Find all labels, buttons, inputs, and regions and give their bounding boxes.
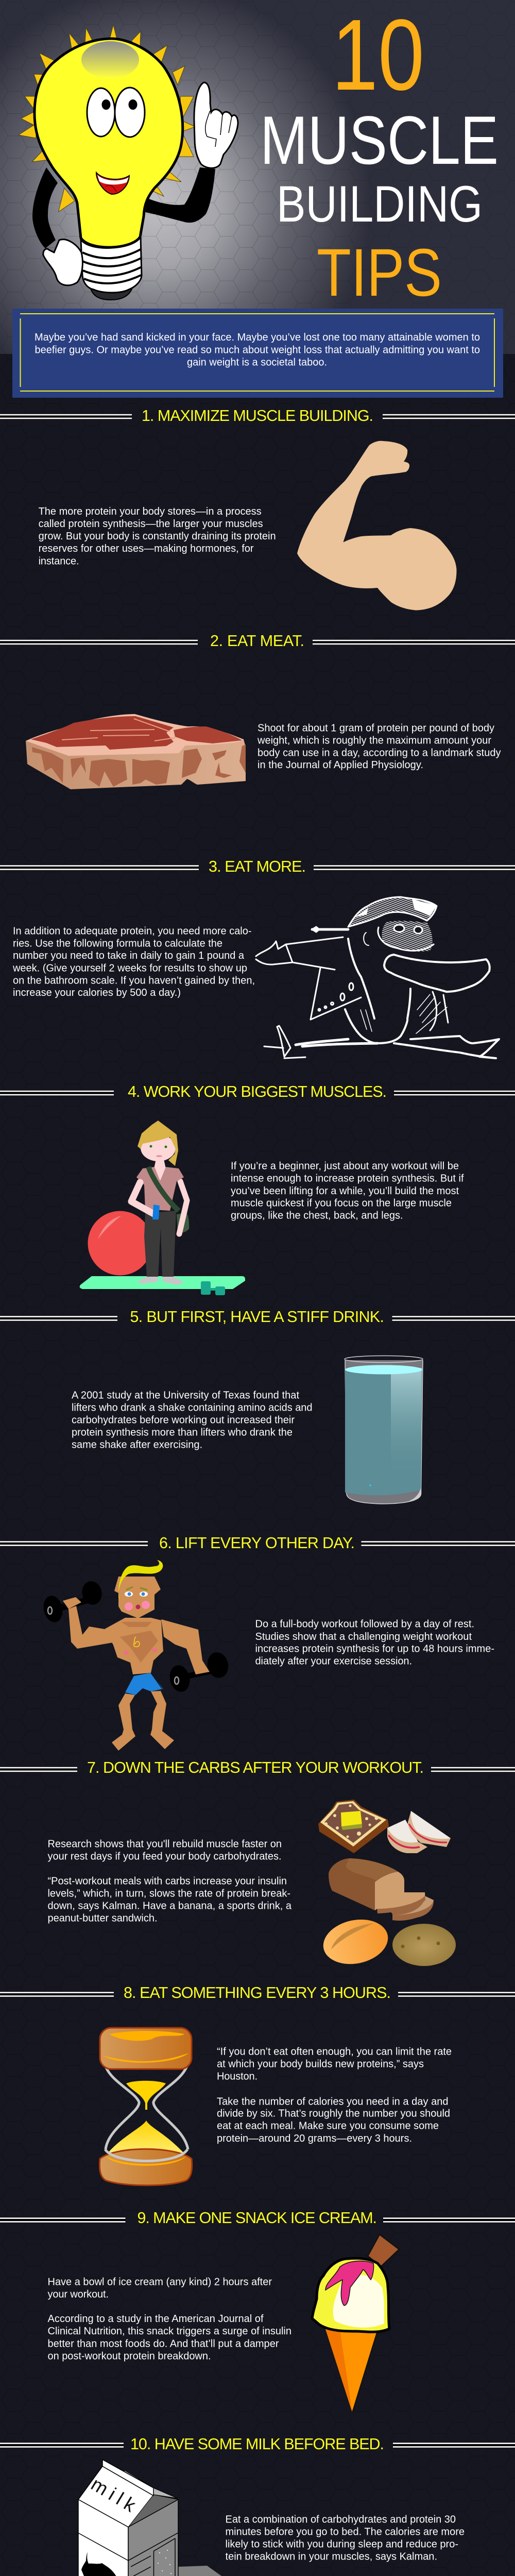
cow silhouette: [80, 2552, 127, 2576]
panel: intro: [12, 309, 503, 398]
text: tip 4: If you’re a beginner, just about any workout will be: [231, 1160, 459, 1172]
intro text: Maybe you’ve had sand kicked in your face. Maybe you’ve lost one too many attainable women to: [35, 332, 480, 343]
panel: tip 4: [0, 1083, 515, 1295]
scoop: [312, 2258, 389, 2332]
panel: tip 9: [0, 2209, 515, 2413]
carton roof: [78, 2466, 153, 2527]
hair: [138, 1121, 178, 1166]
text: tip 9: better than most foods do. And that’ll put a damper: [47, 2338, 279, 2349]
icon: hourglass: [99, 2028, 192, 2185]
strap bag: [177, 1213, 189, 1233]
head: [114, 1577, 161, 1618]
heading: tip 10: [0, 2435, 515, 2453]
bulb highlight: [81, 41, 139, 78]
text: tip 7: your rest days if you feed your body carbohydrates.: [47, 1851, 281, 1862]
loaf of bread: [329, 1858, 434, 1921]
title: BUILDING: [277, 175, 483, 232]
strap: [148, 1167, 179, 1211]
heading: tip 5: [0, 1308, 515, 1326]
text: tip 7: Research shows that you'll rebuild muscle faster on: [47, 1838, 282, 1850]
text: tip 7: down, says Kalman. Have a banana, a sports drink, a: [47, 1900, 292, 1911]
carton label: milk: [88, 2473, 143, 2518]
intro text: [35, 332, 480, 368]
heading: tip 1: [0, 407, 515, 425]
text: tip 3: number you need to take in daily to gain 1 pound a: [13, 950, 245, 961]
text: tip 8: eat at each meal. Make sure you consume some: [217, 2121, 439, 2132]
glass frame: [106, 2066, 188, 2149]
heading: tip 7: 7. DOWN THE CARBS AFTER YOUR WORKOUT.: [87, 1759, 424, 1776]
text: tip 3: week. (Give yourself 2 weeks for results to show up: [12, 962, 247, 974]
text: tip 8: [217, 2046, 452, 2144]
text: tip 1: [39, 506, 276, 567]
icon: woman with exercise ball: [80, 1121, 245, 1295]
text: tip 3: [12, 925, 255, 998]
text: tip 9: According to a study in the American Journal of: [47, 2313, 264, 2325]
text: tip 8: Houston.: [217, 2071, 258, 2082]
bread roll: [319, 1914, 392, 1970]
yoga mat: [80, 1276, 245, 1289]
text: tip 6: increases protein synthesis for up to 48 hours imme-: [255, 1643, 494, 1655]
text: tip 8: at which your body builds new proteins,” says: [217, 2059, 424, 2070]
chocolate flake: [368, 2234, 399, 2266]
head: [141, 1134, 176, 1161]
potato: [392, 1924, 456, 1966]
text: tip 3: on the bathroom scale. If you haven’t gained by then,: [13, 975, 255, 986]
panel: tip 10: [0, 2435, 515, 2576]
panel: tip 7: [0, 1759, 515, 1970]
dumbbells: [201, 1281, 225, 1295]
heading: tip 4: 4. WORK YOUR BIGGEST MUSCLES.: [128, 1083, 387, 1100]
text: tip 7: [47, 1838, 292, 1924]
heading: tip 6: 6. LIFT EVERY OTHER DAY.: [159, 1534, 355, 1552]
text: tip 6: Studies show that a challenging weight workout: [255, 1631, 472, 1642]
text: tip 9: Clinical Nutrition, this snack triggers a surge of insulin: [47, 2326, 291, 2337]
toast: [318, 1800, 389, 1853]
heading: tip 10: 10. HAVE SOME MILK BEFORE BED.: [130, 2435, 384, 2453]
text: tip 5: A 2001 study at the University of Texas found that: [72, 1390, 299, 1401]
text: tip 1: The more protein your body stores—in a process: [39, 506, 262, 517]
icon: carbohydrate foods: [318, 1800, 456, 1970]
text: tip 8: protein—around 20 grams—every 3 hours.: [217, 2133, 412, 2144]
text: tip 3: In addition to adequate protein, you need more calo-: [13, 925, 251, 937]
heading: tip 2: 2. EAT MEAT.: [210, 632, 304, 650]
text: tip 3: increase your calories by 500 a day.): [13, 987, 181, 998]
hair and face shading: [348, 897, 437, 927]
heading: tip 3: [0, 858, 515, 875]
text: tip 8: “If you don’t eat often enough, you can limit the rate: [217, 2046, 452, 2058]
intro text: gain weight is a societal taboo.: [187, 357, 327, 368]
icon: milk carton: [78, 2460, 245, 2576]
panel: tip 1: [0, 407, 515, 610]
text: tip 9: [47, 2276, 291, 2362]
text: tip 7: peanut-butter sandwich.: [47, 1912, 158, 1924]
text: tip 7: “Post-workout meals with carbs increase your insulin: [47, 1875, 287, 1887]
text: tip 9: your workout.: [47, 2289, 109, 2300]
text: tip 2: body can use in a day, according to a landmark study: [258, 747, 501, 758]
heading: tip 9: 9. MAKE ONE SNACK ICE CREAM.: [137, 2209, 377, 2227]
chest shading: [120, 1631, 158, 1663]
title: [260, 0, 499, 310]
title: TIPS: [317, 234, 442, 310]
raspberry syrup: [325, 2261, 374, 2306]
panel: header: [0, 0, 515, 354]
text: tip 6: [255, 1619, 494, 1667]
heading: tip 8: [0, 1984, 515, 2002]
right arm: [179, 1181, 187, 1234]
text: tip 8: Take the number of calories you need in a day and: [217, 2096, 448, 2107]
bottom cap: [99, 2149, 192, 2185]
text: tip 4: muscle quickest if you focus on the large muscle: [231, 1197, 452, 1209]
text: tip 3: ries. Use the following formula to calculate the: [13, 938, 222, 949]
sand: [126, 2081, 166, 2103]
neck: [154, 1159, 166, 1181]
text: tip 2: in the Journal of Applied Physiology.: [258, 759, 423, 771]
text: tip 4: [231, 1160, 464, 1221]
body: [63, 1597, 210, 1751]
panel: tip 3: [0, 858, 515, 1058]
shorts: [125, 1673, 163, 1695]
icon: bodybuilder with dumbbells: [41, 1560, 231, 1751]
left arm: [131, 1182, 154, 1214]
carton shadow: [128, 2566, 245, 2576]
panel: tip 6: [0, 1534, 515, 1751]
heading: tip 6: [0, 1534, 515, 1552]
text: tip 4: you’ve been lifting for a while, you’ll build the most: [231, 1185, 459, 1197]
cone: [325, 2328, 377, 2413]
text: tip 6: Do a full-body workout followed by a day of rest.: [255, 1619, 474, 1630]
text: tip 6: diately after your exercise session.: [255, 1656, 412, 1667]
jam sandwich: [387, 1811, 451, 1853]
carton flap: [124, 2470, 177, 2498]
mouth: [96, 173, 129, 194]
text: tip 5: same shake after exercising.: [72, 1439, 202, 1451]
shoes: [138, 1277, 184, 1285]
carton left face: [78, 2500, 128, 2576]
text: tip 5: carbohydrates before working out increased their: [72, 1415, 295, 1426]
text: tip 10: likely to stick with you during sleep and reduce pro-: [226, 2539, 458, 2550]
text: tip 1: grow. But your body is constantly draining its protein: [39, 531, 276, 542]
left dumbbell: [41, 1580, 104, 1624]
heading: tip 8: 8. EAT SOMETHING EVERY 3 HOURS.: [124, 1984, 391, 2002]
text: tip 1: reserves for other uses—making hormones, for: [39, 543, 254, 554]
top cap: [100, 2028, 192, 2069]
trousers: [144, 1211, 176, 1277]
text: tip 2: Shoot for about 1 gram of protein per pound of body: [258, 722, 494, 734]
text: tip 2: weight, which is roughly the maximum amount your: [257, 735, 491, 746]
intro text: beefier guys. Or maybe you’ve read so much about weight loss that actually admitting you want to: [35, 344, 480, 355]
panel: tip 8: [0, 1984, 515, 2185]
nutrition panel: [131, 2538, 175, 2576]
carton right face: [128, 2500, 178, 2576]
text: tip 5: [72, 1390, 312, 1451]
text: tip 10: tein breakdown in your muscles, says Kalman.: [226, 2551, 437, 2563]
icon: steak: [26, 714, 246, 789]
hair: [118, 1560, 163, 1600]
text: tip 4: intense enough to increase protein synthesis. But if: [231, 1173, 464, 1184]
bulb screw base: [81, 237, 142, 300]
bulb glass: [35, 39, 183, 247]
heading: tip 7: [0, 1759, 515, 1776]
icon: glass of water: [345, 1356, 423, 1504]
heading: tip 1: 1. MAXIMIZE MUSCLE BUILDING.: [142, 407, 373, 425]
text: tip 10: minutes before you go to bed. The calories are more: [226, 2527, 465, 2538]
right dumbbell: [167, 1650, 231, 1693]
eyes: [87, 88, 145, 137]
text: tip 8: divide by six. That’s roughly the number you should: [217, 2108, 450, 2120]
text: tip 5: lifters who drank a shake containing amino acids and: [72, 1402, 312, 1414]
text: tip 4: groups, like the chest, back, and legs.: [231, 1210, 403, 1221]
text: tip 9: Have a bowl of ice cream (any kind) 2 hours after: [47, 2276, 272, 2287]
icon: flexed arm: [297, 441, 457, 610]
title: 10: [332, 0, 424, 111]
heading: tip 3: 3. EAT MORE.: [209, 858, 306, 875]
text: tip 10: [226, 2514, 465, 2563]
heading: tip 5: 5. BUT FIRST, HAVE A STIFF DRINK.: [130, 1308, 384, 1326]
heading: tip 4: [0, 1083, 515, 1100]
heading: tip 2: [0, 632, 515, 650]
icon: ice cream cone: [312, 2234, 399, 2413]
bulb rays: [19, 25, 195, 212]
text: tip 7: levels,” which, in turn, slows the rate of protein break-: [47, 1888, 290, 1899]
icon: light bulb mascot: [19, 25, 238, 300]
panel: tip 2: [0, 632, 515, 789]
text: tip 10: Eat a combination of carbohydrates and protein 30: [226, 2514, 456, 2526]
exercise ball: [88, 1211, 152, 1276]
water bottle: [152, 1205, 160, 1219]
panel: tip 5: [0, 1308, 515, 1504]
text: tip 9: on post-workout protein breakdown.: [47, 2350, 211, 2362]
text: tip 1: called protein synthesis—the larger your muscles: [39, 518, 263, 530]
text: tip 5: protein synthesis more than lifters who drank the: [72, 1427, 293, 1438]
pointing hand: [194, 82, 238, 168]
shirt: [136, 1167, 184, 1211]
bulb arms: [32, 167, 215, 248]
text: tip 2: [257, 722, 501, 771]
icon: running fat man: [256, 897, 499, 1058]
text: tip 1: instance.: [39, 555, 79, 567]
heading: tip 9: [0, 2209, 515, 2227]
lower hand: [43, 240, 82, 285]
